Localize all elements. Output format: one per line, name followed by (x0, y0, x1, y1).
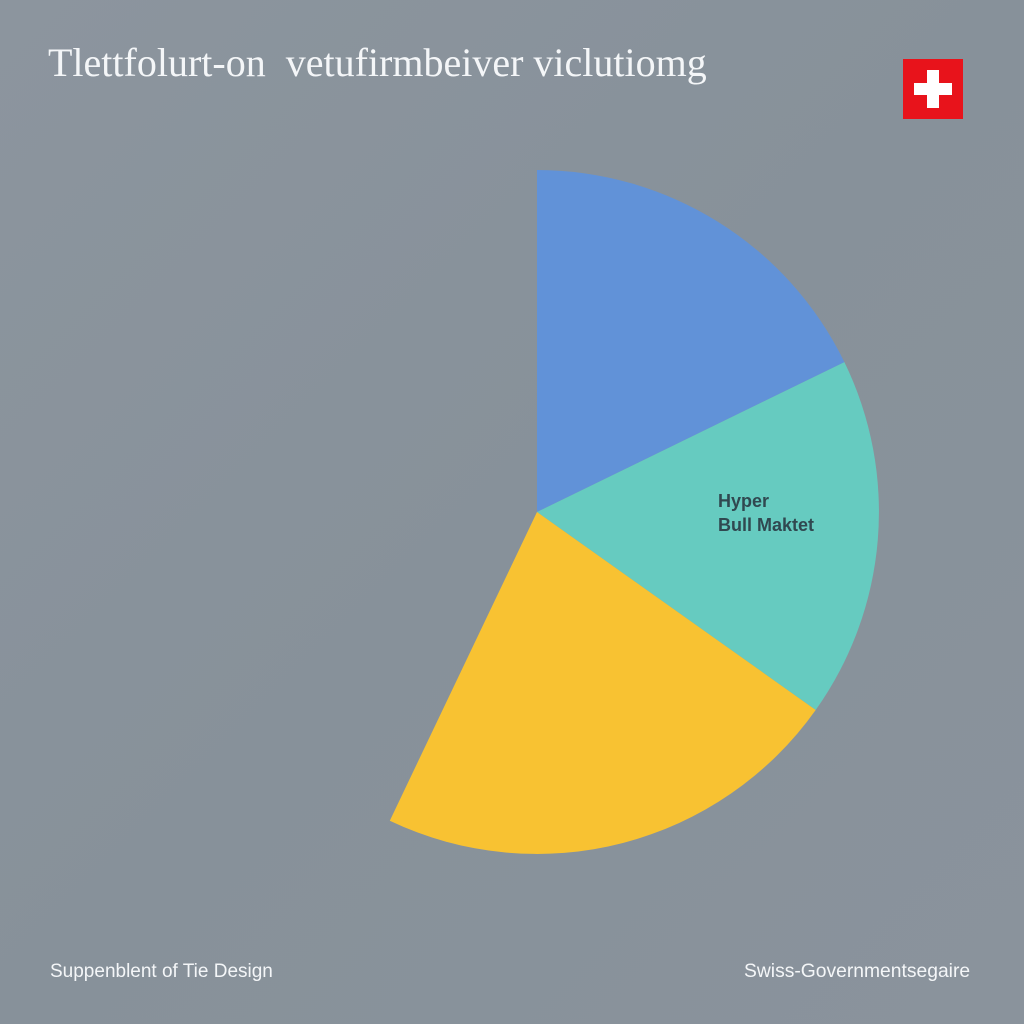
footer right: Swiss-Governmentsegaire (744, 961, 970, 982)
wedge: blue (537, 170, 844, 512)
wedge: yellow (390, 512, 816, 854)
footer left: Suppenblent of Tie Design (50, 961, 273, 982)
wedge: teal (537, 362, 879, 710)
icon: swiss flag (903, 59, 963, 119)
title: Tlettfolurt-on vetufirmbeiver viclutiomg (48, 40, 707, 85)
wedge label: Bull Maktet (718, 515, 814, 535)
wedge label: Hyper (718, 491, 769, 511)
